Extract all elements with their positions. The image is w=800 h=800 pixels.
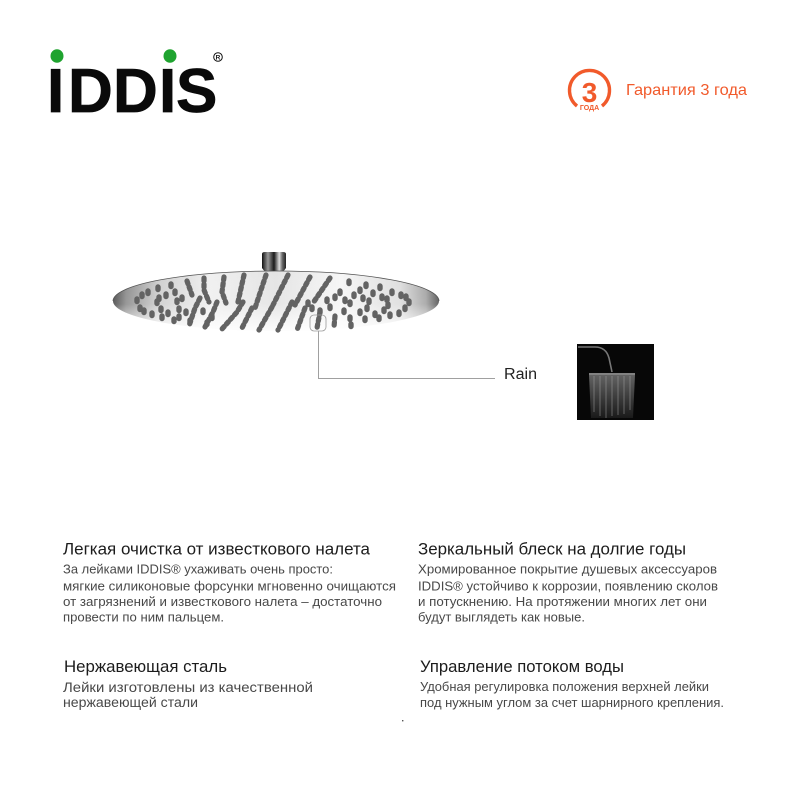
body text: провести по ним пальцем. <box>63 610 224 624</box>
feature: water flow control <box>420 658 724 710</box>
warranty text: Гарантия 3 года <box>626 82 747 99</box>
long streaks <box>187 275 335 330</box>
body text: будут выглядеть как новые. <box>418 610 585 624</box>
body text: под нужным углом за счет шарнирного крепления. <box>420 695 724 710</box>
scattered nozzle dots <box>137 281 409 326</box>
body text: нержавеющей стали <box>63 695 198 710</box>
body text: Хромированное покрытие душевых аксессуаров <box>418 562 717 576</box>
body text: мягкие силиконовые форсунки мгновенно очищаются <box>63 578 396 594</box>
body text <box>418 562 718 624</box>
logo: IDDIS: S <box>176 57 217 126</box>
thumbnail: rain shower photo <box>577 344 654 420</box>
body text: За лейками IDDIS® ухаживать очень просто: <box>63 562 333 576</box>
leader line <box>318 331 495 378</box>
logo: IDDIS: R <box>216 54 221 62</box>
body text: IDDIS® устойчиво к коррозии, появлению сколов <box>418 578 718 594</box>
icon: 3 year warranty: 3 <box>582 77 597 108</box>
warranty badge <box>570 70 747 112</box>
body text <box>63 680 313 710</box>
shower disc <box>112 270 440 332</box>
logo: IDDIS: I <box>159 57 176 126</box>
heading: Легкая очистка от известкового налета <box>63 540 371 558</box>
logo: IDDIS: I <box>47 57 64 126</box>
label: Rain: Rain <box>504 366 537 383</box>
shower connector <box>262 252 286 272</box>
body text <box>63 562 396 624</box>
icon: 3 year warranty: ГОДА <box>580 105 599 112</box>
nozzles <box>137 275 409 330</box>
logo: IDDIS: D <box>68 57 113 126</box>
feature: stainless steel <box>63 658 313 710</box>
body text: и потускнению. На протяжении многих лет они <box>418 594 707 609</box>
body text: Удобная регулировка положения верхней лейки <box>420 679 709 694</box>
product: rain shower head <box>112 252 440 332</box>
heading: Зеркальный блеск на долгие годы <box>418 540 686 558</box>
body text: от загрязнений и известкового налета – достаточно <box>63 594 382 609</box>
logo: IDDIS: D <box>113 57 158 126</box>
body text <box>420 679 724 710</box>
feature: easy cleaning <box>63 540 396 624</box>
feature: mirror shine <box>418 540 718 624</box>
icon: 3 year warranty <box>570 70 610 112</box>
logo: IDDIS <box>47 49 222 126</box>
body text: Лейки изготовлены из качественной <box>63 680 313 695</box>
heading: Нержавеющая сталь <box>64 658 227 676</box>
callout ring <box>310 315 326 331</box>
heading: Управление потоком воды <box>420 658 624 676</box>
